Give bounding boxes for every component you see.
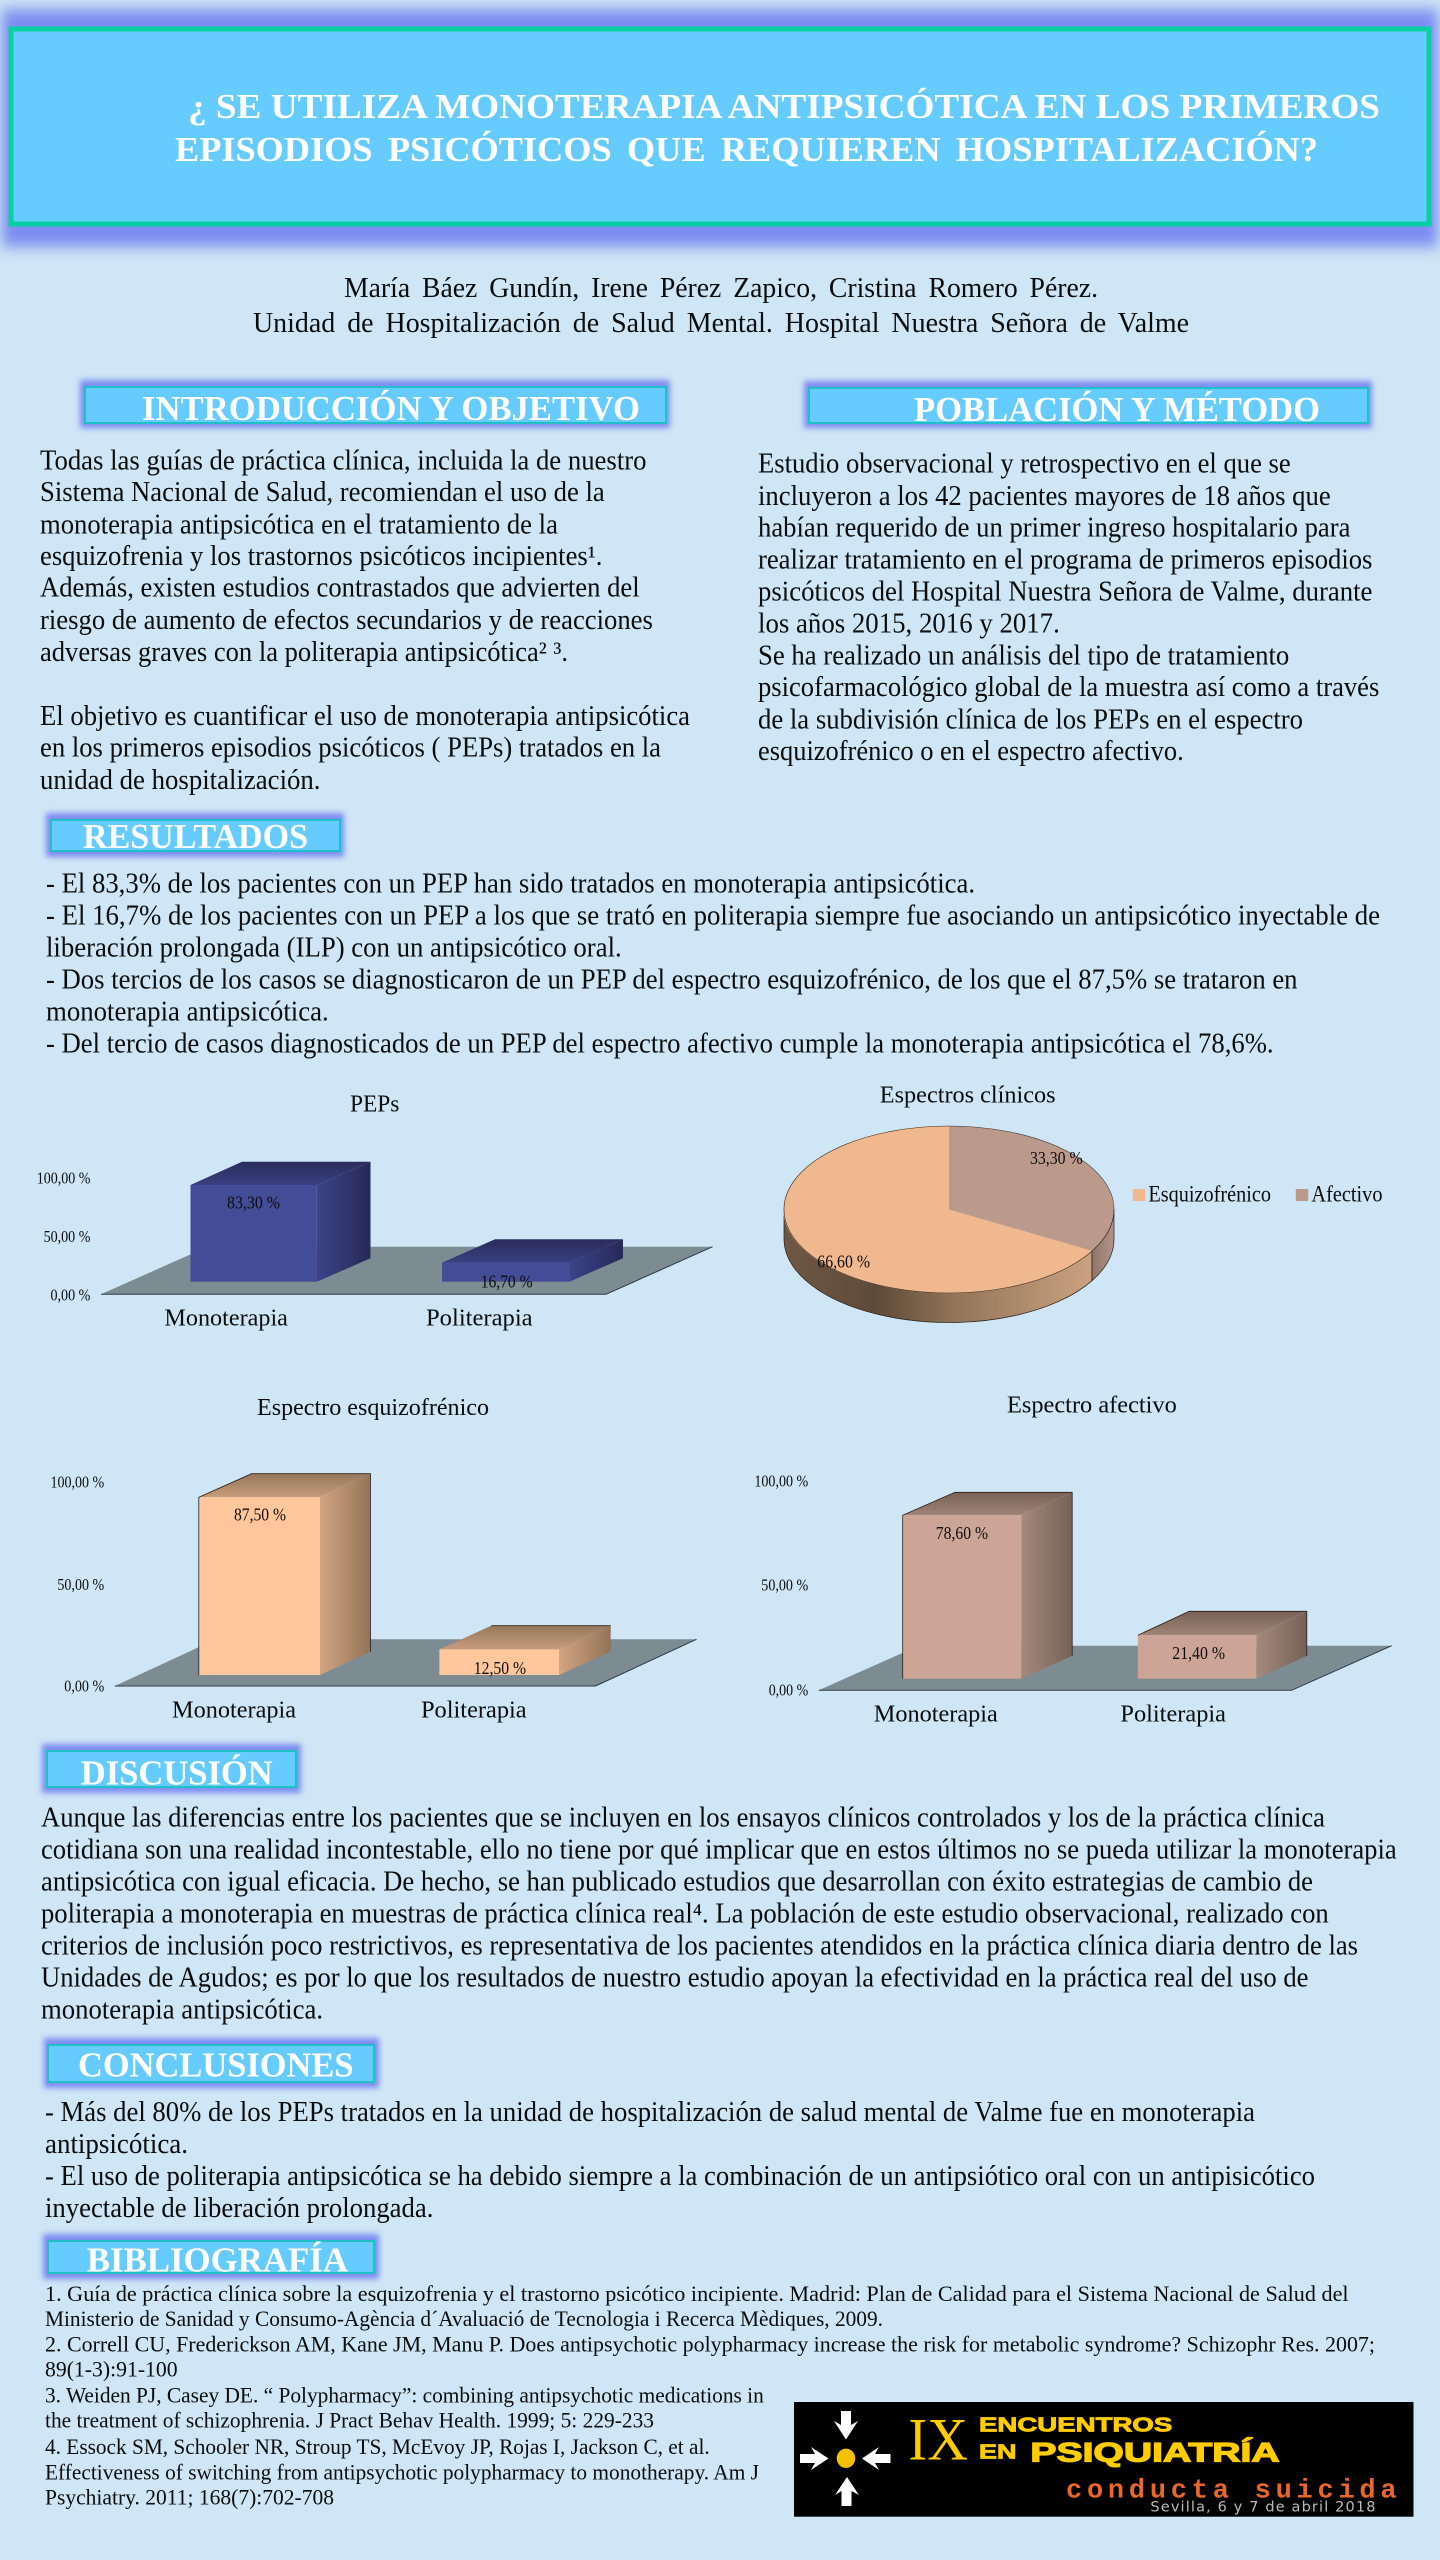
logo text: EN bbox=[979, 2441, 1016, 2463]
heading: bibliografía: BIBLIOGRAFÍA bbox=[87, 2241, 349, 2280]
chart title: Espectros clínicos: Espectros clínicos bbox=[880, 1083, 1056, 1109]
text: bibliografía: 3. Weiden PJ, Casey DE. “ Polypharmacy”: combining antipsychotic medications in bbox=[45, 2383, 764, 2408]
heading: introducción y objetivo bbox=[80, 380, 670, 428]
authors and affiliation: María Báez Gundín, Irene Pérez Zapico, Cristina Romero Pérez. bbox=[344, 273, 1098, 304]
heading: conclusiones bbox=[44, 2038, 379, 2088]
text: bibliografía: 4. Essock SM, Schooler NR, Stroup TS, McEvoy JP, Rojas I, Jackson C, et al. bbox=[45, 2434, 710, 2459]
bar: Politerapia 12,50 %: 12,50 % bbox=[474, 1658, 526, 1678]
data labels: 33,30 % bbox=[1030, 1148, 1083, 1168]
bar: Politerapia 12,50 % bbox=[439, 1626, 611, 1678]
text: introducción: esquizofrenia y los trastornos psicóticos incipientes¹. bbox=[40, 541, 602, 572]
chart title: Espectro esquizofrénico: Espectro esquizofrénico bbox=[257, 1395, 489, 1421]
bar: Monoterapia 87,50 % bbox=[199, 1474, 370, 1675]
text: introducción: Todas las guías de práctica clínica, incluida la de nuestro bbox=[40, 445, 646, 476]
text: resultados bbox=[46, 869, 1380, 1060]
legend bbox=[1133, 1182, 1382, 1207]
legend: Esquizofrénico bbox=[1148, 1182, 1271, 1207]
bar: Politerapia 16,70 %: 16,70 % bbox=[481, 1272, 533, 1292]
text: bibliografía: 1. Guía de práctica clínica sobre la esquizofrenia y el trastorno psicótico incipiente. Madrid: Plan de Calidad para el Sistema Nacional de Salud del bbox=[45, 2281, 1349, 2306]
y axis labels bbox=[754, 1472, 808, 1700]
text: población y método bbox=[758, 449, 1379, 767]
authors and affiliation: Unidad de Hospitalización de Salud Mental. Hospital Nuestra Señora de Valme bbox=[253, 308, 1189, 339]
text: bibliografía: 2. Correll CU, Frederickson AM, Kane JM, Manu P. Does antipsychotic polypharmacy increase the risk for metabolic syndrome? Schizophr Res. 2007; bbox=[45, 2332, 1375, 2357]
slice: Esquizofrénico 66,60 % bbox=[783, 1126, 1092, 1293]
text: introducción: El objetivo es cuantificar el uso de monoterapia antipsicótica bbox=[40, 701, 691, 732]
text: resultados: liberación prolongada (ILP) con un antipsicótico oral. bbox=[46, 933, 622, 964]
chart floor bbox=[819, 1646, 1392, 1690]
slice: Afectivo 33,30 % bbox=[949, 1126, 1113, 1251]
title banner bbox=[2, 9, 1438, 247]
logo text: IX bbox=[908, 2406, 968, 2472]
logo: IX Encuentros en Psiquiatría bbox=[794, 2402, 1414, 2517]
text: conclusiones: - Más del 80% de los PEPs tratados en la unidad de hospitalización de salud mental de Valme fue en monoterapia bbox=[45, 2097, 1256, 2128]
text: bibliografía: 89(1-3):91-100 bbox=[45, 2357, 178, 2382]
text: discusión: monoterapia antipsicótica. bbox=[41, 1995, 323, 2026]
title: EPISODIOS PSICÓTICOS QUE REQUIEREN HOSPITALIZACIÓN? bbox=[175, 129, 1318, 169]
y axis labels: 50,00 % bbox=[761, 1576, 808, 1595]
text: discusión bbox=[41, 1803, 1397, 2026]
text: introducción: Además, existen estudios contrastados que advierten del bbox=[40, 573, 640, 604]
text: discusión: Unidades de Agudos; es por lo que los resultados de nuestro estudio apoyan la efectividad en la práctica real del uso de bbox=[41, 1963, 1308, 1994]
heading: población y método: POBLACIÓN Y MÉTODO bbox=[914, 389, 1320, 429]
data labels: 66,60 % bbox=[817, 1252, 870, 1272]
text: discusión: antipsicótica con igual eficacia. De hecho, se han publicado estudios que desarrollan con éxito estrategias de cambio de bbox=[41, 1867, 1313, 1898]
heading: conclusiones: CONCLUSIONES bbox=[78, 2046, 354, 2085]
text: población y método: esquizofrénico o en el espectro afectivo. bbox=[758, 736, 1184, 767]
text: resultados: - El 83,3% de los pacientes con un PEP han sido tratados en monoterapia antipsicótica. bbox=[46, 869, 975, 900]
y axis labels bbox=[50, 1473, 104, 1696]
text: resultados: - El 16,7% de los pacientes con un PEP a los que se trató en politerapia siempre fue asociando un antipsicótico inyectable de bbox=[46, 900, 1380, 931]
category labels: Monoterapia bbox=[172, 1698, 296, 1724]
text: conclusiones: inyectable de liberación prolongada. bbox=[45, 2193, 433, 2224]
category labels bbox=[874, 1702, 1226, 1728]
legend: Afectivo bbox=[1311, 1182, 1382, 1207]
heading: discusión bbox=[42, 1744, 301, 1793]
chart floor bbox=[101, 1247, 713, 1294]
text: discusión: cotidiana son una realidad incontestable, ello no tiene por qué implicar que en estos últimos no se pueda utilizar la monoterapia bbox=[41, 1834, 1397, 1865]
text: población y método: los años 2015, 2016 y 2017. bbox=[758, 609, 1060, 640]
logo text: ENCUENTROS bbox=[979, 2415, 1172, 2437]
text: bibliografía: the treatment of schizophrenia. J Pract Behav Health. 1999; 5: 229-233 bbox=[45, 2408, 654, 2433]
text: introducción: adversas graves con la politerapia antipsicótica² ³. bbox=[40, 637, 568, 668]
text: población y método: Estudio observacional y retrospectivo en el que se bbox=[758, 449, 1291, 480]
text: población y método: habían requerido de un primer ingreso hospitalario para bbox=[758, 513, 1351, 544]
heading: bibliografía bbox=[43, 2234, 379, 2280]
text: bibliografía: Psychiatry. 2011; 168(7):702-708 bbox=[45, 2485, 334, 2510]
heading: población y método bbox=[804, 381, 1372, 429]
logo text: PSIQUIATRÍA bbox=[1030, 2437, 1280, 2468]
category labels: Politerapia bbox=[1120, 1702, 1226, 1728]
y axis labels: 0,00 % bbox=[769, 1681, 808, 1700]
bar chart: PEPs bbox=[37, 1092, 713, 1332]
bar: Monoterapia 83,30 %: 83,30 % bbox=[227, 1192, 280, 1212]
text: población y método: Se ha realizado un análisis del tipo de tratamiento bbox=[758, 640, 1289, 671]
y axis labels: 50,00 % bbox=[44, 1227, 90, 1246]
y axis labels: 100,00 % bbox=[50, 1473, 104, 1492]
y axis labels bbox=[37, 1168, 90, 1305]
bar: Politerapia 21,40 % bbox=[1138, 1611, 1307, 1679]
icon: converging arrows bbox=[800, 2411, 890, 2506]
text: bibliografía: Effectiveness of switching from antipsychotic polypharmacy to monotherapy. Am J bbox=[45, 2459, 759, 2484]
category labels bbox=[172, 1698, 527, 1724]
logo text: conducta suicida bbox=[1066, 2476, 1397, 2506]
authors and affiliation bbox=[253, 273, 1189, 339]
chart title: PEPs: PEPs bbox=[350, 1092, 399, 1118]
text: introducción: en los primeros episodios psicóticos ( PEPs) tratados en la bbox=[40, 733, 662, 764]
bar: Monoterapia 87,50 %: 87,50 % bbox=[234, 1505, 286, 1525]
text: población y método: de la subdivisión clínica de los PEPs en el espectro bbox=[758, 704, 1303, 735]
bar: Politerapia 21,40 %: 21,40 % bbox=[1172, 1643, 1225, 1663]
text: población y método: realizar tratamiento en el programa de primeros episodios bbox=[758, 544, 1372, 575]
text: discusión: politerapia a monoterapia en muestras de práctica clínica real⁴. La población de este estudio observacional, realizado con bbox=[41, 1899, 1329, 1930]
category labels: Politerapia bbox=[426, 1306, 533, 1332]
heading: resultados bbox=[46, 813, 344, 857]
logo text bbox=[908, 2406, 1397, 2516]
y axis labels: 100,00 % bbox=[37, 1168, 90, 1187]
y axis labels: 100,00 % bbox=[754, 1472, 808, 1491]
bar chart: espectro esquizofrénico bbox=[50, 1395, 696, 1724]
text: discusión: criterios de inclusión poco restrictivos, es representativa de los pacientes atendidos en la práctica clínica diaria dentro de las bbox=[41, 1931, 1358, 1962]
text: población y método: psicóticos del Hospital Nuestra Señora de Valme, durante bbox=[758, 577, 1372, 608]
title: ¿ SE UTILIZA MONOTERAPIA ANTIPSICÓTICA EN LOS PRIMEROS bbox=[188, 86, 1380, 126]
text: resultados: monoterapia antipsicótica. bbox=[46, 997, 329, 1028]
text: introducción: riesgo de aumento de efectos secundarios y de reacciones bbox=[40, 605, 653, 636]
bar: Monoterapia 78,60 %: 78,60 % bbox=[936, 1523, 988, 1543]
text: bibliografía: Ministerio de Sanidad y Consumo-Agència d´Avaluació de Tecnologia i Recerca Mèdiques, 2009. bbox=[45, 2306, 883, 2331]
bar: Politerapia 16,70 % bbox=[442, 1239, 623, 1292]
text: población y método: psicofarmacológico global de la muestra así como a través bbox=[758, 672, 1379, 703]
pie chart: espectros clínicos bbox=[783, 1083, 1382, 1323]
heading: resultados: RESULTADOS bbox=[83, 817, 308, 856]
title bbox=[175, 86, 1380, 169]
bar: Monoterapia 83,30 % bbox=[190, 1162, 370, 1282]
text: resultados: - Dos tercios de los casos se diagnosticaron de un PEP del espectro esquizofrénico, de los que el 87,5% se trataron en bbox=[46, 965, 1298, 996]
text: discusión: Aunque las diferencias entre los pacientes que se incluyen en los ensayos clínicos controlados y los de la práctica clínica bbox=[41, 1803, 1326, 1834]
text: conclusiones bbox=[45, 2097, 1315, 2224]
bar: Monoterapia 78,60 % bbox=[903, 1492, 1072, 1679]
text: resultados: - Del tercio de casos diagnosticados de un PEP del espectro afectivo cumple la monoterapia antipsicótica el 78,6%. bbox=[46, 1029, 1274, 1060]
y axis labels: 0,00 % bbox=[64, 1677, 104, 1696]
text: población y método: incluyeron a los 42 pacientes mayores de 18 años que bbox=[758, 481, 1331, 512]
text: bibliografía bbox=[45, 2281, 1375, 2510]
heading: discusión: DISCUSIÓN bbox=[81, 1752, 273, 1792]
text: introducción: monoterapia antipsicótica en el tratamiento de la bbox=[40, 509, 558, 540]
category labels: Monoterapia bbox=[164, 1306, 288, 1332]
bar chart: espectro afectivo bbox=[754, 1392, 1392, 1728]
category labels: Politerapia bbox=[421, 1698, 527, 1724]
pie 3D rim bbox=[784, 1210, 1114, 1323]
text: conclusiones: antipsicótica. bbox=[45, 2129, 188, 2160]
pie outline bbox=[784, 1126, 1114, 1293]
category labels bbox=[164, 1306, 533, 1332]
y axis labels: 50,00 % bbox=[57, 1575, 104, 1594]
chart floor bbox=[115, 1639, 697, 1686]
text: introducción: Sistema Nacional de Salud, recomiendan el uso de la bbox=[40, 477, 605, 508]
chart title: Espectro afectivo: Espectro afectivo bbox=[1007, 1392, 1177, 1418]
data labels bbox=[817, 1148, 1083, 1272]
text: introducción: unidad de hospitalización. bbox=[40, 765, 320, 796]
text: conclusiones: - El uso de politerapia antipsicótica se ha debido siempre a la combinación de un antipsiótico oral con un antipisicótico bbox=[45, 2161, 1315, 2192]
category labels: Monoterapia bbox=[874, 1702, 998, 1728]
text: introducción bbox=[40, 445, 691, 796]
y axis labels: 0,00 % bbox=[50, 1286, 90, 1305]
logo text: Sevilla, 6 y 7 de abril 2018 bbox=[1150, 2500, 1376, 2516]
heading: introducción y objetivo: INTRODUCCIÓN Y OBJETIVO bbox=[142, 388, 640, 428]
